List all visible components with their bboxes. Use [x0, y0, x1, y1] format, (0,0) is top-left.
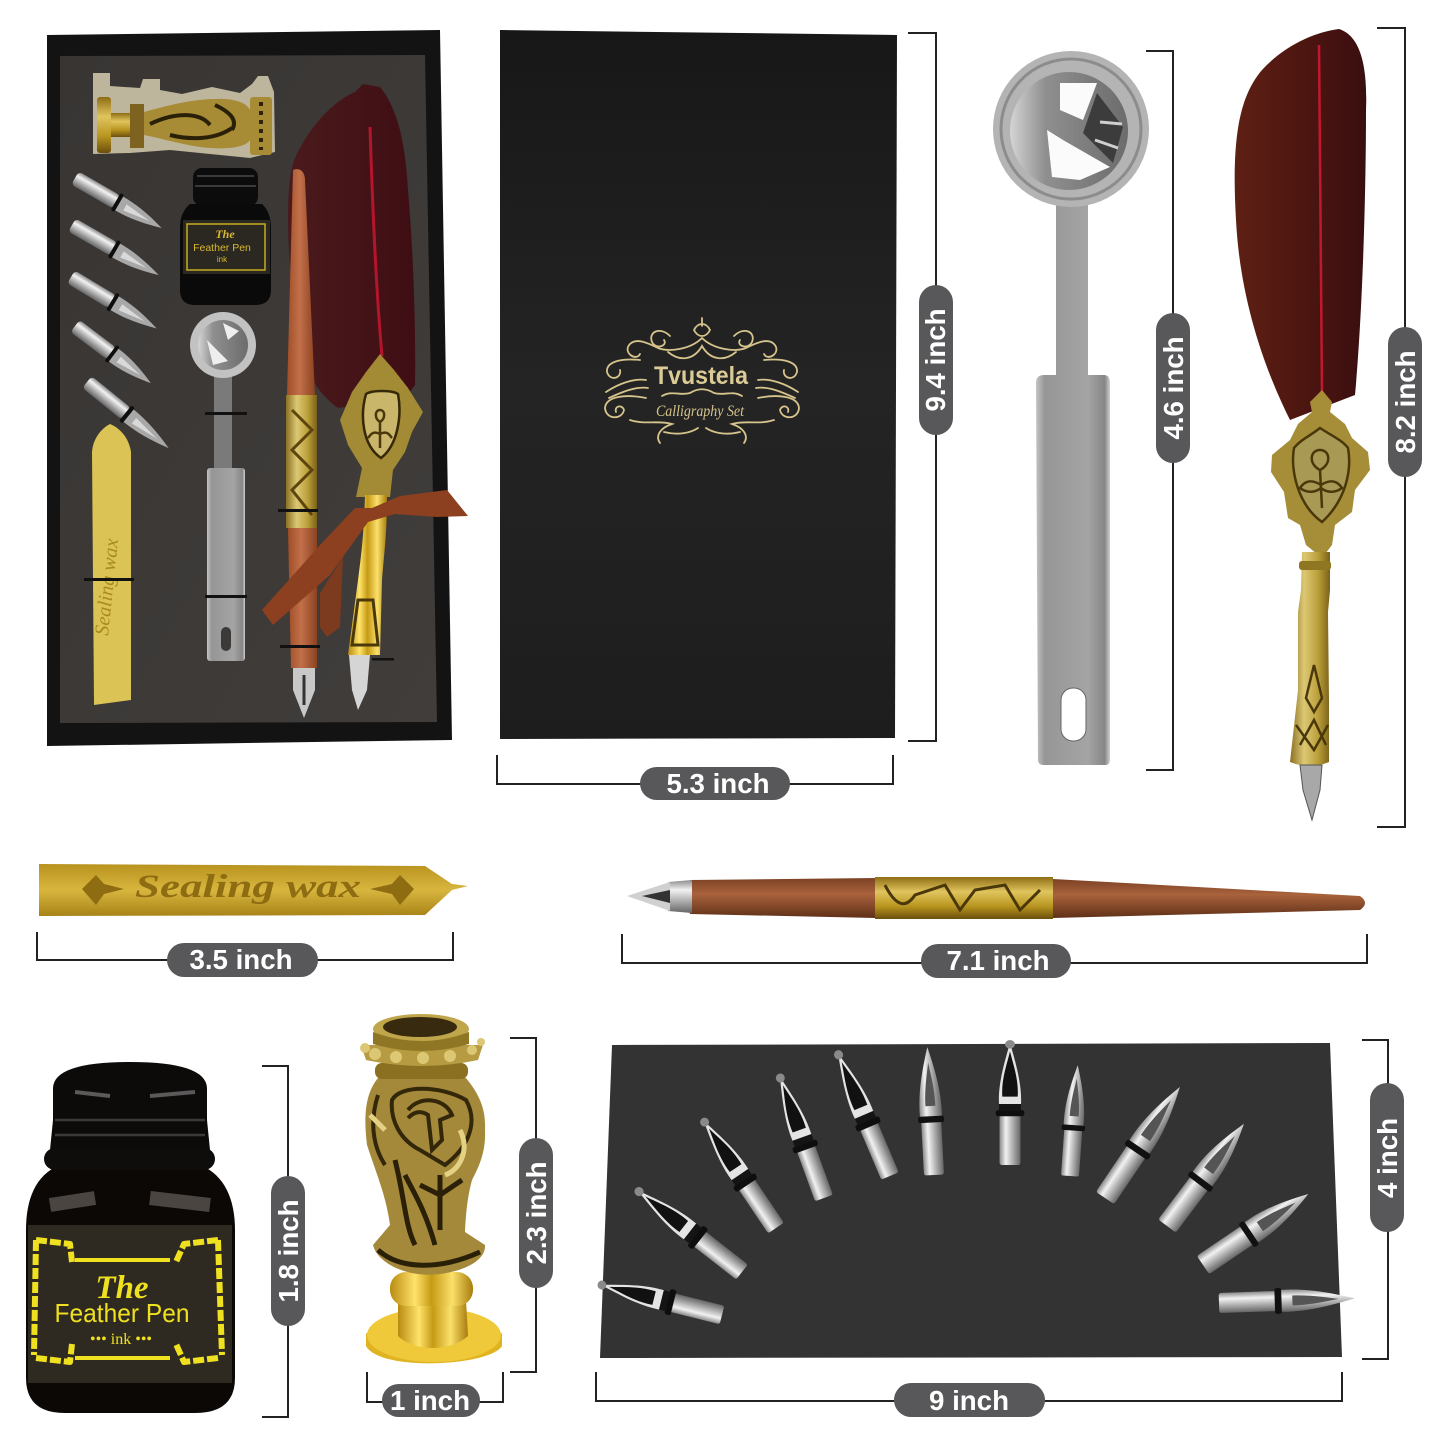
sealing wax stick — [39, 864, 468, 916]
dimension: pen 7.1 inch: 7.1 inch — [946, 945, 1050, 976]
dimension: box width 5.3 inch — [497, 755, 893, 800]
dimension: ink 1.8 inch: 1.8 inch — [273, 1199, 304, 1303]
ink bottle: ••• ink ••• — [90, 1331, 152, 1348]
spoon bowl — [993, 51, 1149, 207]
sealing wax stick: Sealing wax — [135, 869, 361, 905]
logo: Tvustela Calligraphy Set: Calligraphy Set — [656, 403, 745, 420]
wax seal stamp in box — [93, 73, 275, 158]
dimension: feather 8.2 inch: 8.2 inch — [1390, 350, 1421, 454]
sealing wax stick in box: Sealing wax — [91, 537, 123, 637]
feather vane — [1235, 29, 1366, 420]
wooden dip pen in box — [278, 169, 320, 718]
dimension: spoon 4.6 inch: 4.6 inch — [1158, 336, 1189, 440]
wax spoon in box — [190, 312, 256, 661]
dimension: wax 3.5 inch: 3.5 inch — [189, 944, 293, 975]
dimension: box height 9.4 inch: 9.4 inch — [920, 308, 951, 412]
dimension: stamp height 2.3 inch: 2.3 inch — [521, 1161, 552, 1265]
dimension: pen 7.1 inch — [622, 934, 1367, 978]
seal base — [366, 1306, 502, 1363]
ink bottle in box — [180, 168, 271, 305]
cap — [50, 1062, 210, 1150]
dimension: mat width 9 inch — [596, 1372, 1342, 1417]
label — [28, 1225, 232, 1383]
panel: open gift box with contents — [47, 30, 468, 746]
dimension: stamp height 2.3 inch — [510, 1038, 553, 1372]
small nibs in box — [66, 169, 175, 456]
dimension: wax 3.5 inch — [37, 932, 453, 977]
sealing wax stick in box — [84, 424, 134, 705]
wax seal stamp — [360, 1014, 502, 1363]
dimension: stamp width 1 inch — [367, 1372, 503, 1417]
ink bottle — [26, 1062, 235, 1413]
dimension: box width 5.3 inch: 5.3 inch — [666, 768, 770, 799]
fleur ornaments — [82, 875, 414, 905]
large feather with gold holder — [1235, 29, 1370, 820]
dimension: mat width 9 inch: 9 inch — [929, 1385, 1009, 1416]
knob — [390, 1272, 473, 1306]
panel: closed gift box — [500, 30, 897, 739]
ornate plate — [1271, 390, 1370, 558]
box lid — [500, 30, 897, 739]
feather spine — [1319, 45, 1322, 395]
ink bottle in box: ink — [217, 255, 228, 264]
gold handle — [1290, 552, 1330, 766]
bead band — [375, 1063, 468, 1079]
dimension: box height 9.4 inch — [908, 33, 953, 741]
wooden dip pen — [627, 877, 1365, 919]
feather in box — [288, 84, 415, 408]
wax spoon — [993, 51, 1149, 765]
dimension: mat height 4 inch — [1362, 1040, 1404, 1359]
dimension: spoon 4.6 inch — [1146, 51, 1190, 770]
top ring — [373, 1014, 469, 1044]
dimension: ink 1.8 inch — [262, 1066, 305, 1417]
spoon handle — [1036, 195, 1110, 765]
logo: Tvustela Calligraphy Set — [605, 318, 799, 443]
nibs — [595, 1040, 1355, 1328]
ink bottle: The — [95, 1270, 149, 1306]
dimension: stamp width 1 inch: 1 inch — [390, 1385, 470, 1416]
box tray — [60, 55, 437, 723]
dimension: mat height 4 inch: 4 inch — [1372, 1118, 1403, 1198]
dimension: feather 8.2 inch — [1377, 28, 1422, 827]
mat — [600, 1043, 1342, 1358]
box frame — [47, 30, 452, 746]
logo: Tvustela Calligraphy Set: Tvustela — [654, 362, 749, 390]
ink bottle in box: The — [215, 227, 235, 241]
pen nib — [1300, 765, 1322, 820]
ornate body — [365, 1078, 485, 1275]
panel: nib assortment on black mat — [595, 1040, 1355, 1358]
ink bottle: Feather Pen — [54, 1298, 190, 1328]
ink bottle in box: Feather Pen — [193, 242, 251, 254]
body — [26, 1165, 235, 1413]
ribbon — [262, 490, 468, 637]
ornate gold feather holder in box — [340, 354, 423, 710]
